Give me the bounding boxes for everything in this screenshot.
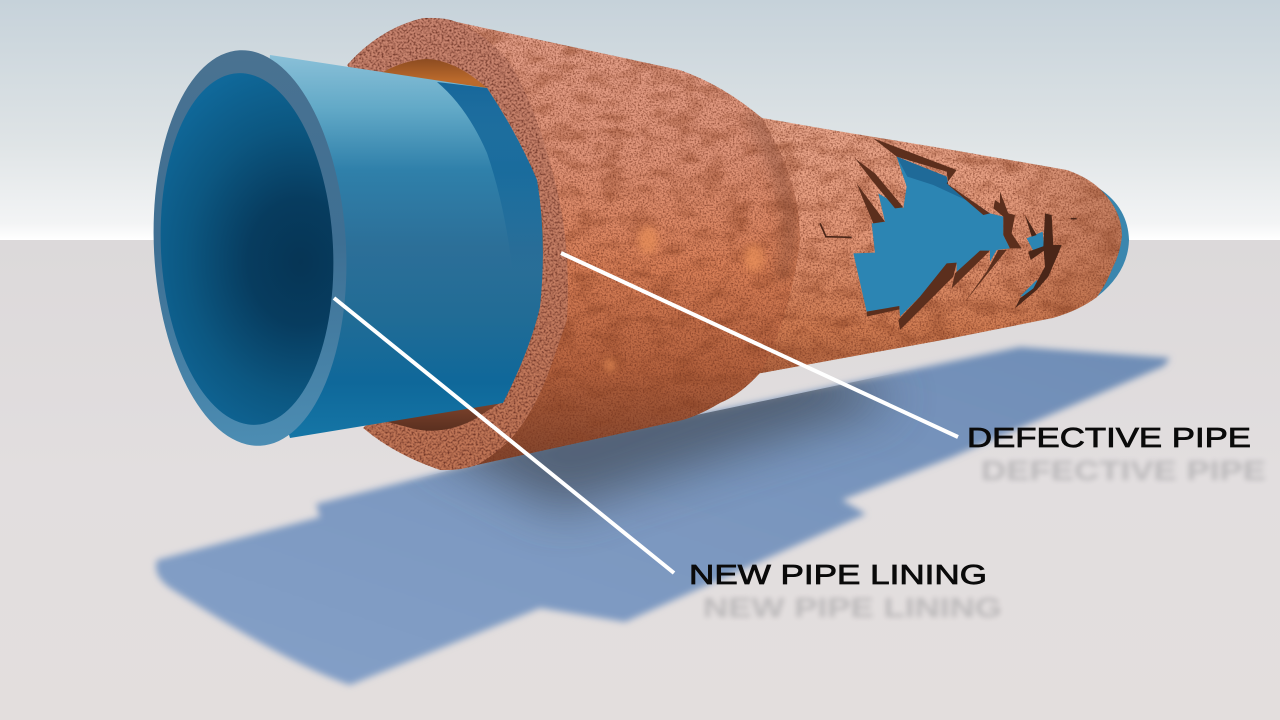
label shadow: new pipe lining: NEW PIPE LINING [703,592,1002,623]
leader line: new pipe lining [334,298,674,573]
torn hole details [820,138,1077,330]
background: sky [0,0,1280,240]
defective pipe: collar front face [347,18,568,470]
label: new pipe lining: NEW PIPE LINING [689,559,987,590]
label shadow: defective pipe: DEFECTIVE PIPE [981,455,1266,486]
defective pipe: narrow section [740,114,1122,377]
right-end shading [1000,158,1122,329]
lining end ring [144,45,356,451]
shadow inside hole [897,157,977,205]
pipe shadow on floor [156,347,1170,685]
new pipe lining: outer body [144,45,543,451]
blue lining tip at far end [1098,189,1129,296]
lining inner bore [152,69,342,429]
defective pipe: wide collar base [440,22,800,465]
torn edge strips [855,138,1022,330]
exposed blue lining [853,157,1010,317]
collar shoulder shading [752,112,790,280]
collar inner hole [380,59,543,431]
small cracks [820,219,1077,237]
leader line: defective pipe [561,253,958,437]
orange rust spots [604,226,764,372]
label: defective pipe: DEFECTIVE PIPE [967,422,1251,453]
background: floor [0,240,1280,720]
lining shaded crescent [437,82,543,310]
small holes near pipe end [1020,232,1044,297]
